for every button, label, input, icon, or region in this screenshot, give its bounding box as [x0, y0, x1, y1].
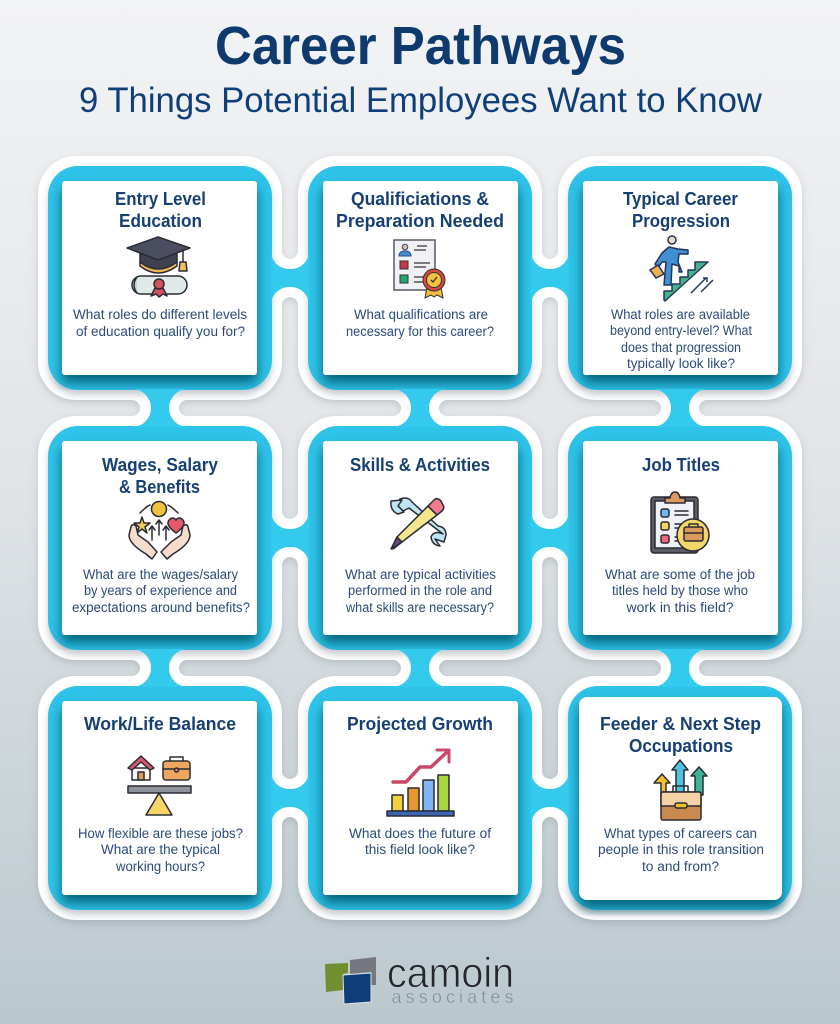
description: does that progression: [621, 340, 741, 355]
description: what skills are necessary?: [345, 600, 494, 615]
panel: typical career progression: [568, 166, 792, 390]
heading: Job Titles: [642, 454, 720, 475]
description: [73, 307, 247, 339]
panel: qualifications and preparation: [308, 166, 532, 390]
description: What qualifications are: [354, 307, 488, 322]
description: typically look like?: [627, 356, 735, 371]
logo mark: [325, 957, 376, 1004]
description: people in this role transition: [598, 842, 764, 857]
heading: Work/Life Balance: [84, 713, 236, 734]
heading: Skills & Activities: [350, 454, 490, 475]
logo wordmark: camoin: [387, 949, 514, 996]
panel: projected growth: [308, 686, 532, 910]
description: to and from?: [642, 859, 719, 874]
description: What are the wages/salary: [83, 567, 238, 582]
heading: Education: [119, 210, 202, 231]
subtitle: 9 Things Potential Employees Want to Know: [79, 81, 763, 120]
description: beyond entry-level? What: [610, 323, 752, 338]
heading: Preparation Needed: [336, 210, 504, 231]
heading: [600, 713, 761, 756]
heading: Projected Growth: [347, 713, 493, 734]
title: [79, 16, 763, 120]
description: working hours?: [115, 859, 205, 874]
description: [346, 307, 494, 339]
description: What does the future of: [349, 826, 491, 841]
panel: wages, salary and benefits: [48, 426, 272, 650]
description: What are some of the job: [605, 567, 755, 582]
logo tagline: associates: [392, 987, 514, 1007]
icon: clipboard with briefcase badge: [651, 492, 709, 553]
panel: feeder and next step occupations: [568, 686, 792, 910]
description: performed in the role and: [348, 583, 492, 598]
panel: job titles: [568, 426, 792, 650]
heading: Entry Level: [115, 188, 206, 209]
heading: Typical Career: [623, 188, 738, 209]
description: What are the typical: [101, 842, 220, 857]
heading: Feeder & Next Step: [600, 713, 761, 734]
description: of education qualify you for?: [76, 324, 245, 339]
description: work in this field?: [625, 600, 734, 615]
description: What are typical activities: [345, 567, 496, 582]
heading: Wages, Salary: [102, 454, 219, 475]
heading: Qualificiations &: [351, 188, 489, 209]
heading: Progression: [632, 210, 730, 231]
description: What roles do different levels: [73, 307, 247, 322]
logo: camoin associates: [325, 949, 514, 1007]
panel: work/life balance: [48, 686, 272, 910]
description: What types of careers can: [604, 826, 757, 841]
description: this field look like?: [365, 842, 475, 857]
heading: [102, 454, 219, 497]
icon: rising bar chart: [387, 750, 454, 816]
title: Career Pathways: [215, 16, 626, 76]
description: [605, 567, 755, 615]
blue connectors between panels: [133, 251, 707, 825]
description: [78, 826, 243, 874]
description: How flexible are these jobs?: [78, 826, 243, 841]
description: expectations around benefits?: [72, 600, 250, 615]
heading: [115, 188, 206, 231]
icon: home and work on a balance: [128, 756, 191, 815]
description: [610, 307, 752, 371]
heading: Occupations: [629, 735, 733, 756]
description: [345, 567, 496, 615]
icon: wrench and pencil: [391, 498, 446, 549]
description: [349, 826, 491, 857]
icon: person climbing stairs: [650, 236, 713, 301]
icon: resume with award seal: [394, 240, 445, 298]
description: titles held by those who: [612, 583, 748, 598]
description: necessary for this career?: [346, 324, 494, 339]
icon: graduation cap and diploma: [127, 237, 190, 297]
white pathway frame: [38, 156, 802, 920]
heading: [623, 188, 738, 231]
heading: & Benefits: [119, 476, 200, 497]
icon: hands with coin, star and heart: [129, 502, 190, 559]
panel: entry level education: [48, 166, 272, 390]
heading: [336, 188, 504, 231]
description: What roles are available: [611, 307, 750, 322]
description: [72, 567, 250, 615]
panel: skills and activities: [308, 426, 532, 650]
description: by years of experience and: [84, 583, 237, 598]
icon: briefcase with rising arrows: [654, 760, 707, 820]
description: [598, 826, 764, 874]
